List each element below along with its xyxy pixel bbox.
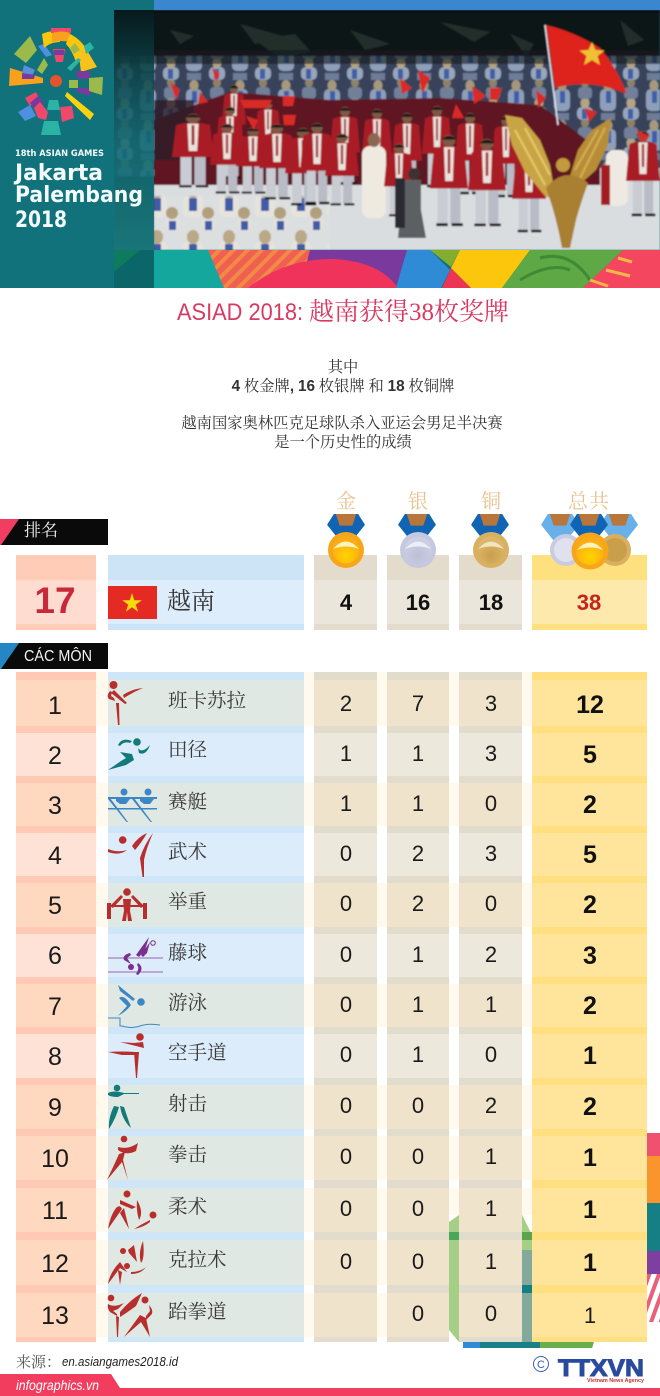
row 11: 0 <box>412 1196 424 1221</box>
row 6: 2 <box>485 942 497 967</box>
background ornament behind table <box>450 1215 595 1348</box>
row 1: 3 <box>485 691 497 716</box>
Vietnam summary row: 18 <box>479 590 503 615</box>
Vietnamese flag in photo <box>545 25 627 125</box>
logo text: Jakarta <box>13 161 103 186</box>
row 8 <box>48 1033 597 1078</box>
row 13: 跆拳道 <box>168 1301 227 1323</box>
icon: athletics <box>108 738 150 770</box>
logo text: 18th ASIAN GAMES <box>15 149 104 159</box>
row 5: 0 <box>485 891 497 916</box>
row 2: 5 <box>583 741 597 769</box>
row 2: 1 <box>412 741 424 766</box>
row 3: 赛艇 <box>168 791 207 813</box>
row 9: 2 <box>583 1093 597 1121</box>
Vietnam summary row: 16 <box>406 590 430 615</box>
row 8: 8 <box>48 1043 62 1071</box>
footer bar: infographics.vn <box>16 1377 99 1393</box>
row 6: 3 <box>583 942 597 970</box>
row 8: 0 <box>340 1042 352 1067</box>
icon: boxing <box>107 1136 138 1180</box>
row 10: 10 <box>41 1145 69 1173</box>
icon: weightlifting <box>107 888 147 921</box>
column headings: 铜 <box>481 490 501 513</box>
row 7: 1 <box>485 992 497 1017</box>
row 10 <box>41 1136 597 1180</box>
row 7: 1 <box>412 992 424 1017</box>
row 8: 0 <box>485 1042 497 1067</box>
row 2: 1 <box>340 741 352 766</box>
teal tint band <box>114 10 154 250</box>
row 3 <box>48 788 597 822</box>
medals <box>327 514 638 570</box>
label bar: CÁC MÔN <box>0 643 108 669</box>
row 8: 1 <box>583 1042 597 1070</box>
Vietnam summary row: 38 <box>577 590 601 615</box>
column headings <box>336 490 610 513</box>
row 4: 2 <box>412 841 424 866</box>
row 12: 12 <box>41 1250 69 1278</box>
row 1: 班卡苏拉 <box>168 689 246 712</box>
row 6: 1 <box>412 942 424 967</box>
row 9: 9 <box>48 1094 62 1122</box>
icon: swimming <box>108 985 160 1028</box>
row 4: 5 <box>583 841 597 869</box>
column headings: 银 <box>408 490 428 513</box>
row 5: 0 <box>340 891 352 916</box>
row 3: 1 <box>340 791 352 816</box>
intro text: 4 枚金牌, 16 枚银牌 和 18 枚铜牌 <box>232 378 454 395</box>
row 5: 举重 <box>168 891 207 913</box>
row 13: 0 <box>485 1301 497 1326</box>
row 12: 0 <box>340 1249 352 1274</box>
column headings: 总共 <box>568 490 610 513</box>
row 10: 0 <box>412 1144 424 1169</box>
games logo <box>9 28 143 233</box>
row 2: 3 <box>485 741 497 766</box>
Vietnam summary row: 4 <box>340 590 353 615</box>
logo text: Palembang <box>15 183 143 208</box>
row 4: 3 <box>485 841 497 866</box>
row 5: 2 <box>412 891 424 916</box>
row 10: 拳击 <box>168 1144 207 1166</box>
Vietnam summary row: 17 <box>34 580 76 621</box>
event photo <box>114 10 660 250</box>
row 9: 0 <box>340 1093 352 1118</box>
label bar: 排名: 排名 <box>24 521 58 540</box>
row 11 <box>42 1190 597 1229</box>
icon: three medals <box>541 514 638 570</box>
Vietnam summary row <box>16 555 647 630</box>
logo text <box>13 149 143 233</box>
row 7: 7 <box>48 993 62 1021</box>
row 7: 0 <box>340 992 352 1017</box>
row 1: 7 <box>412 691 424 716</box>
row 9 <box>48 1085 597 1129</box>
row 11: 11 <box>42 1197 68 1225</box>
row 1: 12 <box>576 691 604 719</box>
row 6 <box>48 937 597 975</box>
row 9: 射击 <box>168 1093 207 1115</box>
row 11: 0 <box>340 1196 352 1221</box>
column headings: 金 <box>336 490 356 513</box>
row 13 <box>41 1293 596 1337</box>
row 9: 0 <box>412 1093 424 1118</box>
row 7: 2 <box>583 992 597 1020</box>
row 10: 1 <box>583 1144 597 1172</box>
row 12: 克拉术 <box>168 1248 227 1271</box>
logo: TTXVN: C <box>537 1359 545 1371</box>
intro text: 越南国家奥林匹克足球队杀入亚运会男足半决赛 <box>181 414 503 432</box>
row 6: 6 <box>48 942 62 970</box>
decorative colour strip <box>114 250 660 288</box>
right edge colour stripes <box>647 1133 660 1322</box>
source line: en.asiangames2018.id <box>62 1354 179 1369</box>
golden bird costume <box>505 115 611 248</box>
row 4: 4 <box>48 842 62 870</box>
row 6: 0 <box>340 942 352 967</box>
source line <box>16 1354 179 1371</box>
row 5 <box>48 888 597 921</box>
intro text: 是一个历史性的成绩 <box>274 434 412 451</box>
row 5: 2 <box>583 891 597 919</box>
icon: Vietnam flag <box>108 586 157 619</box>
icon: jujitsu <box>108 1190 156 1229</box>
row 11: 1 <box>485 1196 497 1221</box>
row 12: 1 <box>583 1249 597 1277</box>
even row tint <box>16 733 96 1078</box>
row 7 <box>48 985 597 1028</box>
logo text: 2018 <box>15 208 67 233</box>
row 13: 1 <box>584 1303 596 1328</box>
row 3: 1 <box>412 791 424 816</box>
icon: canoe <box>108 681 143 725</box>
footer bar <box>0 1374 660 1396</box>
row 7: 游泳 <box>168 992 208 1014</box>
icon: taekwondo <box>108 1293 152 1337</box>
row 12: 0 <box>412 1249 424 1274</box>
label bar: CÁC MÔN: CÁC MÔN <box>24 648 92 665</box>
row 3: 3 <box>48 792 62 820</box>
row 1 <box>48 681 604 725</box>
row bands <box>16 672 96 1342</box>
row 2: 2 <box>48 742 62 770</box>
ornament showing through gaps <box>449 1215 532 1342</box>
row 8: 空手道 <box>168 1042 227 1064</box>
title: ASIAD 2018: <box>177 299 303 326</box>
row 5: 5 <box>48 892 62 920</box>
icon: shooting <box>108 1085 139 1129</box>
logo: TTXVN: TTXVN <box>558 1355 644 1382</box>
icon: silver medal <box>398 514 436 568</box>
row 13: 13 <box>41 1302 69 1330</box>
Vietnam summary row: 越南 <box>167 588 215 615</box>
intro text: 其中 <box>328 359 358 376</box>
row 8: 1 <box>412 1042 424 1067</box>
row 12 <box>41 1241 597 1285</box>
icon: gold medal <box>327 514 365 568</box>
title <box>177 298 509 326</box>
icon: sepak takraw <box>108 937 163 975</box>
row 13: 0 <box>412 1301 424 1326</box>
logo: TTXVN: Vietnam News Agency <box>587 1378 645 1384</box>
table background <box>16 672 647 1342</box>
row 3: 0 <box>485 791 497 816</box>
logo: TTXVN <box>534 1355 645 1384</box>
row 4: 武术 <box>168 841 207 863</box>
icon: bronze medal <box>471 514 509 568</box>
row 2: 田径 <box>168 739 208 761</box>
row 1: 2 <box>340 691 352 716</box>
row 2 <box>48 738 597 770</box>
row 6: 藤球 <box>168 942 207 964</box>
intro text <box>181 359 503 451</box>
row 12: 1 <box>485 1249 497 1274</box>
row 10: 0 <box>340 1144 352 1169</box>
row 11: 1 <box>583 1196 597 1224</box>
title: 越南获得38枚奖牌 <box>309 298 509 326</box>
row 1: 1 <box>48 692 62 720</box>
header banner <box>0 0 660 288</box>
row 4: 0 <box>340 841 352 866</box>
icon: kurash <box>108 1241 146 1285</box>
row 3: 2 <box>583 791 597 819</box>
row 11: 柔术 <box>168 1196 207 1218</box>
label bar: 排名 <box>0 519 108 545</box>
source line: 来源： <box>16 1354 61 1371</box>
icon: wushu <box>108 833 153 877</box>
row 10: 1 <box>485 1144 497 1169</box>
icon: rowing <box>108 788 157 822</box>
row 9: 2 <box>485 1093 497 1118</box>
row 4 <box>48 833 597 877</box>
icon: karate <box>108 1033 144 1078</box>
